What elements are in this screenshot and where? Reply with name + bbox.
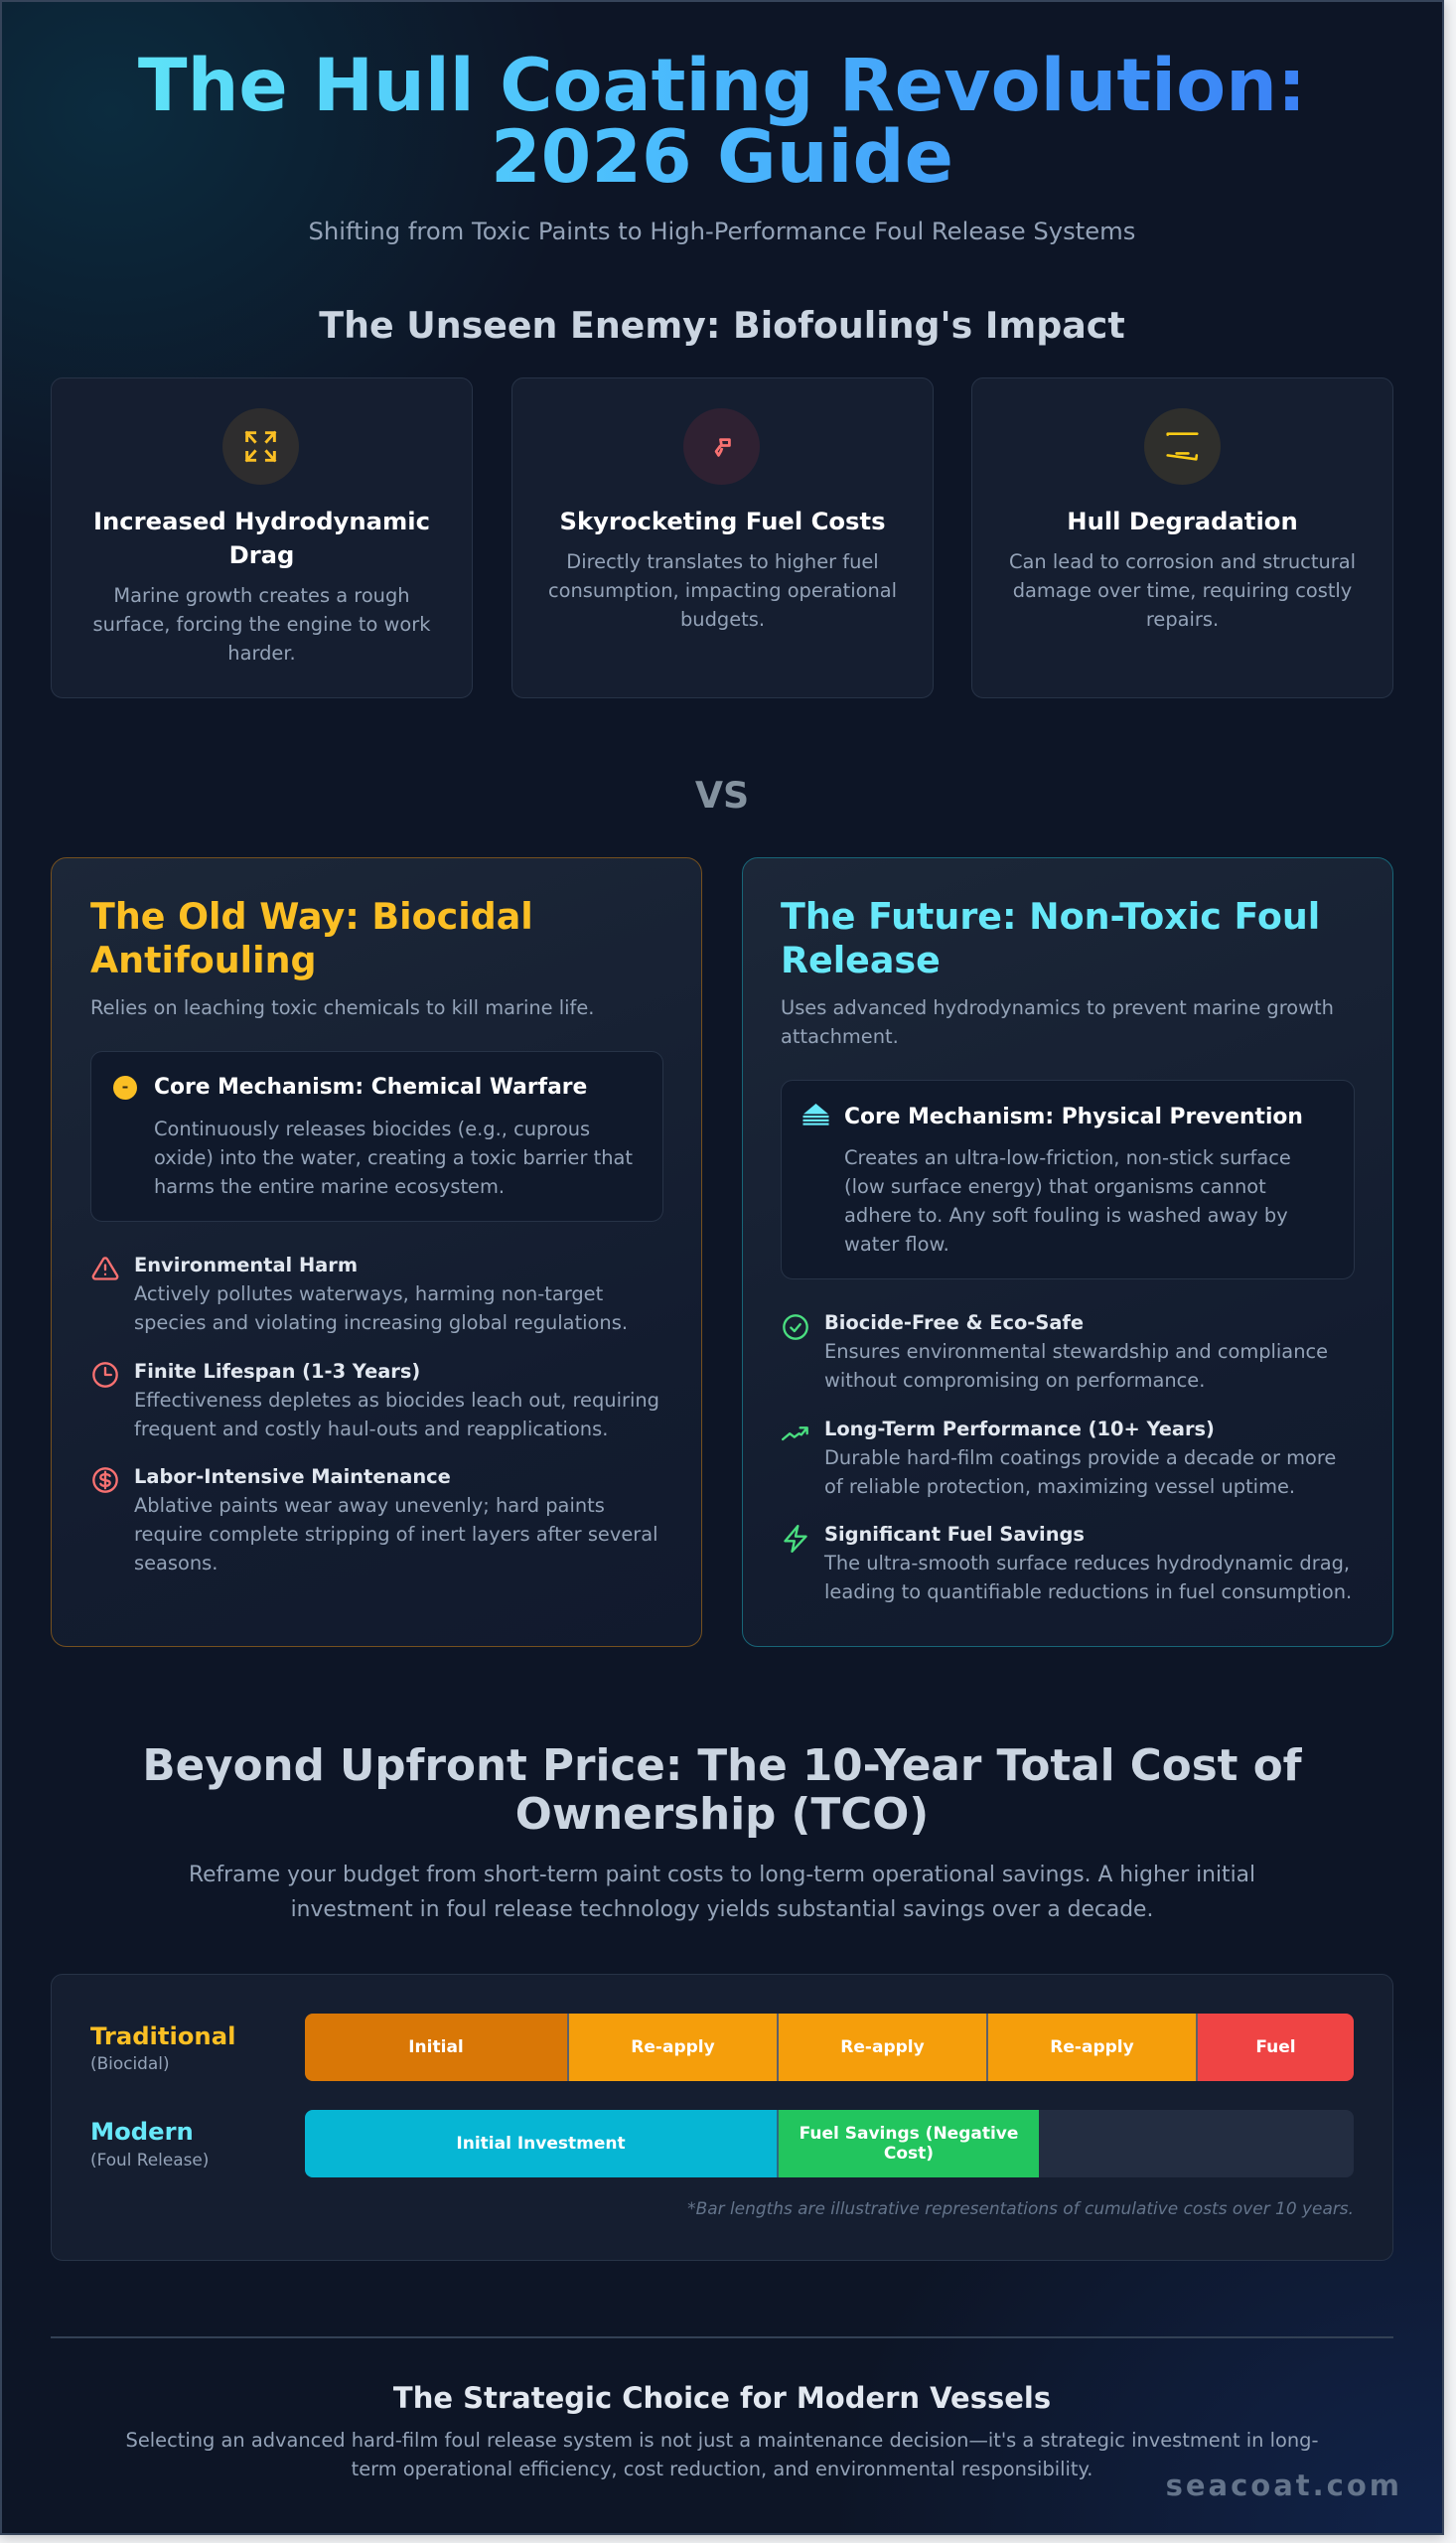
card text: surface, forcing the engine to work bbox=[93, 613, 430, 636]
tco intro text bbox=[189, 1863, 1255, 1922]
callout text: harms the entire marine ecosystem. bbox=[154, 1175, 505, 1198]
item text: seasons. bbox=[134, 1552, 218, 1574]
segment: re-apply bbox=[988, 2014, 1198, 2081]
callout: core mechanism bbox=[781, 1080, 1355, 1279]
panel heading: Release bbox=[781, 939, 941, 981]
tco intro text: investment in foul release technology yields substantial savings over a decade. bbox=[291, 1897, 1153, 1922]
item text bbox=[134, 1282, 628, 1334]
callout text: Creates an ultra-low-friction, non-stick surface bbox=[844, 1146, 1291, 1169]
item heading: Long-Term Performance (10+ Years) bbox=[824, 1417, 1215, 1440]
segment: fuel savings bbox=[779, 2110, 1039, 2177]
item heading: Labor-Intensive Maintenance bbox=[134, 1465, 451, 1488]
watermark: seacoat.com: seacoat.com bbox=[1166, 2468, 1402, 2502]
item: fuel savings bbox=[784, 1522, 1352, 1603]
icon: layered surface bbox=[802, 1104, 828, 1125]
item heading: Significant Fuel Savings bbox=[824, 1522, 1085, 1546]
card text: Can lead to corrosion and structural bbox=[1009, 550, 1356, 573]
bar: traditional costs bbox=[305, 2014, 1354, 2081]
item text bbox=[134, 1389, 659, 1440]
item heading: Finite Lifespan (1-3 Years) bbox=[134, 1360, 420, 1383]
icon: trending up bbox=[782, 1426, 808, 1440]
card heading: Hull Degradation bbox=[1067, 507, 1298, 535]
segment: fuel: Fuel bbox=[1255, 2037, 1296, 2057]
panel: cost bar chart bbox=[51, 1974, 1393, 2261]
card text bbox=[548, 550, 897, 631]
heading: total cost of ownership bbox=[142, 1741, 1302, 1840]
item: biocide-free bbox=[783, 1311, 1328, 1392]
label: traditional bbox=[90, 2021, 235, 2073]
item text: Durable hard-film coatings provide a decade or more bbox=[824, 1446, 1336, 1468]
item text: Actively pollutes waterways, harming non-target bbox=[134, 1282, 603, 1305]
bar: modern costs bbox=[305, 2110, 1354, 2177]
segment: re-apply: Re-apply bbox=[1050, 2037, 1134, 2057]
title: 2026 Guide bbox=[491, 115, 953, 200]
card text: Directly translates to higher fuel bbox=[566, 550, 879, 573]
callout text: (low surface energy) that organisms cannot bbox=[844, 1175, 1266, 1198]
callout heading: Core Mechanism: Physical Prevention bbox=[844, 1105, 1303, 1129]
panel: the old way bbox=[51, 857, 702, 1647]
vs label: VS bbox=[695, 774, 749, 817]
card text: budgets. bbox=[680, 608, 765, 631]
tco intro text: Reframe your budget from short-term paint costs to long-term operational savings. A higher initial bbox=[189, 1863, 1255, 1887]
card text bbox=[93, 584, 431, 665]
segment: re-apply: Re-apply bbox=[631, 2037, 715, 2057]
segment: fuel savings: Fuel Savings (Negative Cost) bbox=[800, 2124, 1018, 2164]
subtitle: Shifting from Toxic Paints to High-Performance Foul Release Systems bbox=[309, 217, 1135, 245]
item text: species and violating increasing global regulations. bbox=[134, 1311, 628, 1334]
callout text bbox=[844, 1146, 1291, 1256]
icon: expand arrows bbox=[222, 408, 299, 485]
segment: initial bbox=[305, 2014, 569, 2081]
item: long-term performance bbox=[782, 1417, 1336, 1498]
segment: re-apply bbox=[569, 2014, 779, 2081]
icon: lightning bolt bbox=[784, 1525, 807, 1553]
panel intro: Relies on leaching toxic chemicals to kill marine life. bbox=[90, 996, 594, 1019]
item: labor-intensive maintenance bbox=[92, 1465, 657, 1574]
panel heading: The Future: Non-Toxic Foul bbox=[781, 895, 1320, 938]
callout: core mechanism bbox=[90, 1051, 663, 1222]
panel heading: The Old Way: Biocidal bbox=[90, 895, 533, 938]
heading: total cost of ownership: Beyond Upfront Price: The 10-Year Total Cost of bbox=[142, 1741, 1302, 1791]
segment: initial: Initial bbox=[408, 2037, 464, 2057]
item heading: Environmental Harm bbox=[134, 1254, 358, 1276]
card heading: Drag bbox=[229, 540, 294, 569]
label: modern: Modern bbox=[90, 2117, 194, 2146]
segment: fuel bbox=[1198, 2014, 1354, 2081]
segment: initial investment bbox=[305, 2110, 779, 2177]
callout text bbox=[154, 1118, 633, 1198]
icon: check circle bbox=[783, 1314, 808, 1340]
card heading: Increased Hydrodynamic bbox=[93, 507, 430, 535]
card text: repairs. bbox=[1146, 608, 1219, 631]
item: finite lifespan bbox=[92, 1360, 659, 1440]
title bbox=[2, 51, 1442, 194]
callout text: adhere to. Any soft fouling is washed away by bbox=[844, 1204, 1288, 1227]
item text: The ultra-smooth surface reduces hydrodynamic drag, bbox=[824, 1552, 1350, 1573]
chart footnote: *Bar lengths are illustrative representations of cumulative costs over 10 years. bbox=[687, 2198, 1354, 2218]
title: The Hull Coating Revolution: bbox=[138, 44, 1306, 128]
panel intro: Uses advanced hydrodynamics to prevent marine growth bbox=[781, 996, 1334, 1019]
item text: of reliable protection, maximizing vessel uptime. bbox=[824, 1475, 1295, 1498]
label: traditional: (Biocidal) bbox=[90, 2053, 170, 2073]
item text: leading to quantifiable reductions in fuel consumption. bbox=[824, 1580, 1352, 1603]
item text: frequent and costly haul-outs and reapplications. bbox=[134, 1418, 608, 1440]
panel: hull degradation bbox=[971, 377, 1393, 698]
heading: total cost of ownership: Ownership (TCO) bbox=[515, 1790, 929, 1840]
panel heading: Antifouling bbox=[90, 939, 317, 981]
closing text bbox=[126, 2429, 1318, 2480]
item text bbox=[824, 1446, 1336, 1498]
panel intro bbox=[781, 996, 1334, 1048]
item heading: Biocide-Free & Eco-Safe bbox=[824, 1311, 1084, 1333]
item text bbox=[824, 1552, 1352, 1603]
callout text: Continuously releases biocides (e.g., cuprous bbox=[154, 1118, 590, 1140]
item text: require complete stripping of inert layers after several bbox=[134, 1523, 657, 1546]
icon: fuel bbox=[683, 408, 760, 485]
divider bbox=[51, 2336, 1393, 2338]
icon: minus circle bbox=[113, 1076, 137, 1100]
label: modern bbox=[90, 2117, 209, 2169]
card text: consumption, impacting operational bbox=[548, 579, 897, 602]
closing heading: The Strategic Choice for Modern Vessels bbox=[393, 2381, 1051, 2415]
item text bbox=[134, 1494, 657, 1574]
card heading: Skyrocketing Fuel Costs bbox=[559, 507, 886, 535]
card text: harder. bbox=[227, 642, 296, 665]
label: modern: (Foul Release) bbox=[90, 2150, 209, 2169]
heading: biofouling impact: The Unseen Enemy: Biofouling's Impact bbox=[319, 304, 1125, 347]
callout text: oxide) into the water, creating a toxic barrier that bbox=[154, 1146, 633, 1169]
segment: re-apply bbox=[779, 2014, 988, 2081]
icon: clock bbox=[92, 1362, 118, 1388]
segment: initial investment: Initial Investment bbox=[456, 2134, 626, 2154]
card text: damage over time, requiring costly bbox=[1013, 579, 1352, 602]
icon: warning bbox=[91, 1257, 119, 1280]
callout heading: Core Mechanism: Chemical Warfare bbox=[154, 1075, 587, 1100]
panel heading bbox=[781, 895, 1320, 981]
label: traditional: Traditional bbox=[90, 2021, 235, 2050]
item text: Effectiveness depletes as biocides leach out, requiring bbox=[134, 1389, 659, 1412]
panel: fuel costs bbox=[511, 377, 934, 698]
item text: Ablative paints wear away unevenly; hard paints bbox=[134, 1494, 605, 1517]
item text: without compromising on performance. bbox=[824, 1369, 1205, 1392]
item: environmental harm bbox=[91, 1254, 628, 1334]
panel: increased hydrodynamic drag bbox=[51, 377, 473, 698]
item text: Ensures environmental stewardship and compliance bbox=[824, 1339, 1328, 1363]
item text bbox=[824, 1339, 1328, 1392]
callout text: water flow. bbox=[844, 1233, 949, 1256]
closing text: term operational efficiency, cost reduction, and environmental responsibility. bbox=[352, 2458, 1092, 2480]
card heading bbox=[93, 507, 430, 569]
closing text: Selecting an advanced hard-film foul release system is not just a maintenance decision—it's a strategic investment in long- bbox=[126, 2429, 1318, 2452]
icon: degradation bbox=[1144, 408, 1221, 485]
icon: dollar bbox=[92, 1467, 118, 1493]
segment: re-apply: Re-apply bbox=[840, 2037, 925, 2057]
panel: the future bbox=[742, 857, 1393, 1647]
panel intro: attachment. bbox=[781, 1025, 899, 1048]
card text: Marine growth creates a rough bbox=[113, 584, 410, 607]
panel heading bbox=[90, 895, 533, 981]
card text bbox=[1009, 550, 1356, 631]
